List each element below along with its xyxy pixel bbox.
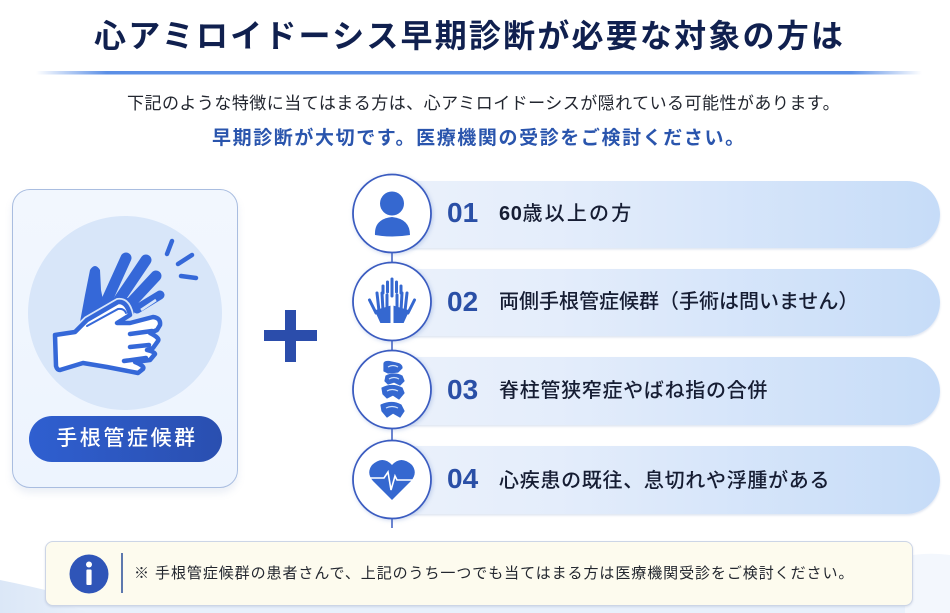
icon: raised hands	[370, 279, 414, 322]
icon: person	[375, 192, 410, 236]
icon: spine	[381, 361, 404, 417]
note box	[45, 541, 913, 606]
icon: information	[70, 554, 108, 594]
divider	[121, 553, 122, 593]
criteria bar 2	[392, 269, 940, 336]
criterion 2 text: 両側手根管症候群（手術は問いません）	[499, 291, 858, 313]
emphasis text: 早期診断が大切です。医療機関の受診をご検討ください。	[212, 128, 746, 149]
number 02: 02	[447, 286, 478, 317]
number 01: 01	[447, 197, 478, 228]
criteria bar 4	[392, 446, 940, 514]
criterion 1 text: 60歳以上の方	[499, 203, 633, 225]
number 03: 03	[447, 374, 478, 405]
label pill	[29, 416, 222, 462]
criteria bar 3	[392, 357, 940, 425]
plus sign	[264, 310, 317, 362]
title: 心アミロイドーシス早期診断が必要な対象の方は	[94, 18, 845, 54]
criteria bar 1	[392, 181, 940, 248]
label pill: 手根管症候群	[56, 427, 198, 450]
intro text: 下記のような特徴に当てはまる方は、心アミロイドーシスが隠れている可能性があります。	[127, 94, 840, 113]
icon: clapping hands	[28, 216, 222, 410]
criterion 3 text: 脊柱管狭窄症やばね指の合併	[499, 380, 768, 402]
panel: carpal tunnel syndrome	[12, 189, 238, 488]
icon: heart with pulse	[369, 460, 415, 500]
number 04: 04	[447, 463, 478, 494]
note text: ※ 手根管症候群の患者さんで、上記のうち一つでも当てはまる方は医療機関受診をご検討ください。	[134, 565, 854, 582]
criterion 4 text: 心疾患の既往、息切れや浮腫がある	[499, 470, 830, 492]
timeline with icons	[351, 172, 435, 528]
